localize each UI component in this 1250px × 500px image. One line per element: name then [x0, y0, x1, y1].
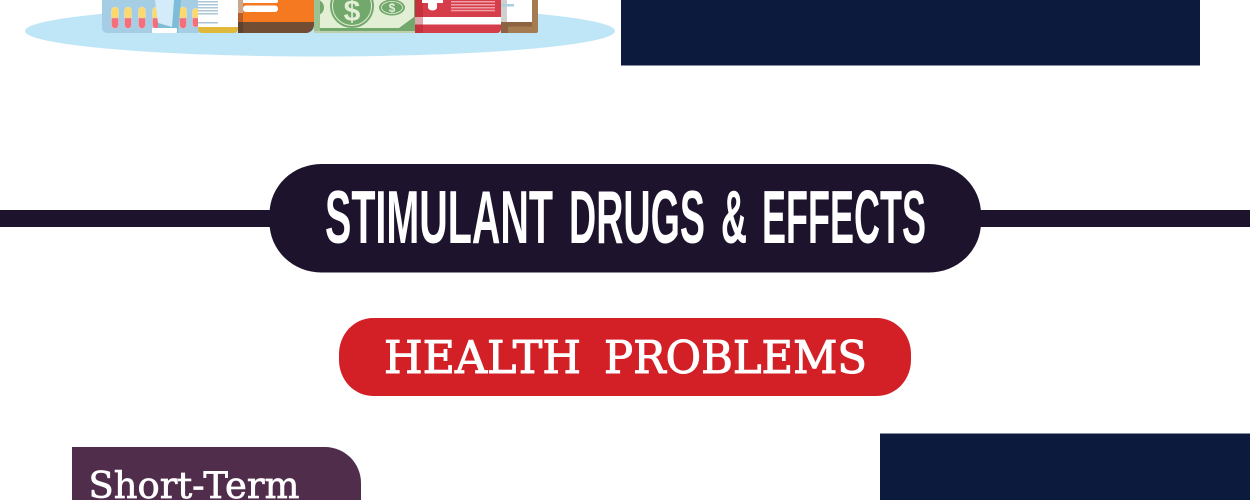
section heading: stimulant drugs and effects: [0, 164, 1250, 272]
icon: orange book: [238, 0, 314, 33]
icon: dollar bill: [308, 0, 415, 33]
icon: clipboard: [501, 0, 538, 33]
navy panel bottom right: [880, 434, 1250, 500]
tab: short-term: [72, 447, 361, 500]
subheading: health problems: PROBLEMS: [604, 331, 867, 384]
icon: blue ellipse shadow: [25, 6, 615, 56]
subheading: health problems: [339, 318, 911, 396]
section heading: stimulant drugs and effects: EFFECTS: [762, 175, 926, 259]
illustration: medicine and money on a blue ellipse: [25, 0, 615, 56]
icon: pill blister pack: [102, 0, 199, 33]
subheading: health problems: HEALTH: [384, 331, 581, 384]
icon: red first-aid book: [415, 0, 501, 33]
section heading: stimulant drugs and effects: DRUGS: [569, 175, 705, 259]
navy panel top right: [621, 0, 1200, 66]
section heading: stimulant drugs and effects: STIMULANT: [325, 175, 553, 259]
icon: glass of water: [152, 0, 181, 33]
icon: dollar bill: $: [389, 1, 396, 15]
section heading: stimulant drugs and effects: &: [721, 175, 747, 259]
icon: prescription document: [198, 0, 238, 33]
